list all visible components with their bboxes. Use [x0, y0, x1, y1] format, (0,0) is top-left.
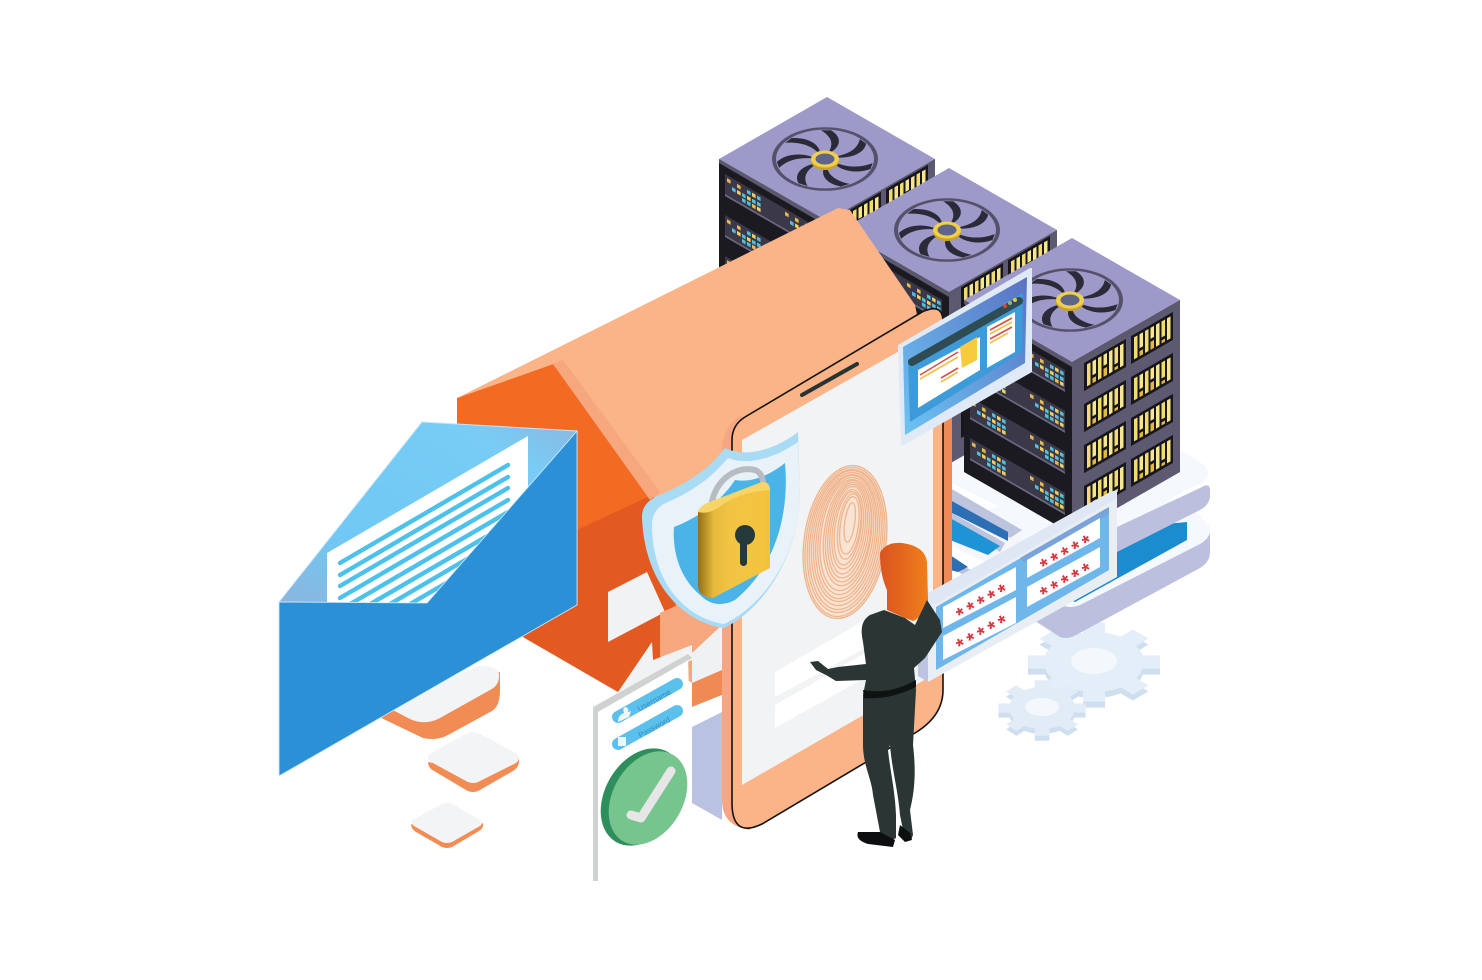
cell: top left: ***** — [953, 578, 1016, 627]
server rack: front — [964, 238, 1180, 534]
window left pane — [918, 337, 980, 408]
icon: small gear — [998, 680, 1086, 741]
padlock — [698, 469, 770, 598]
background box behind phone — [660, 585, 722, 820]
card edge — [593, 654, 692, 881]
body — [810, 600, 942, 845]
tile 2 — [428, 732, 519, 792]
username field: Username — [636, 687, 673, 713]
cell: bottom left: ***** — [953, 609, 1016, 658]
password field — [618, 711, 677, 746]
building wall — [457, 364, 682, 692]
cell: top right: ***** — [1037, 529, 1100, 578]
phone speaker — [802, 364, 857, 395]
belt — [863, 680, 916, 698]
cell: bottom right — [1027, 547, 1100, 607]
hair — [880, 543, 928, 621]
envelope flap — [279, 422, 577, 605]
shoes — [857, 825, 912, 847]
window right pane — [987, 312, 1015, 368]
check badge — [584, 733, 703, 861]
small tile stack — [375, 666, 519, 848]
password panel — [918, 490, 1117, 682]
shield — [642, 432, 800, 628]
shield with padlock — [642, 432, 800, 628]
card body — [593, 655, 692, 882]
woman figure — [810, 543, 942, 847]
phone body — [732, 309, 943, 828]
password field: Password — [637, 715, 672, 740]
building roof — [457, 208, 935, 510]
cell: bottom right: ***** — [1037, 557, 1100, 606]
tile 1 — [375, 666, 500, 739]
card tail — [618, 642, 692, 692]
tile 3 — [411, 802, 483, 848]
envelope front — [279, 431, 577, 776]
cell: bottom left — [943, 597, 1016, 660]
login field 2 — [775, 653, 865, 728]
username field — [618, 684, 677, 722]
phone side edge — [722, 416, 750, 830]
platform under servers — [940, 385, 1210, 638]
letter — [327, 436, 528, 610]
fingerprint — [794, 460, 896, 624]
server rack: back — [719, 97, 935, 393]
browser window panel — [898, 268, 1032, 445]
server rack: middle — [841, 168, 1057, 464]
phone — [722, 309, 952, 830]
window title bar — [912, 298, 1019, 362]
cell: top right — [1027, 518, 1100, 578]
login card — [584, 642, 703, 882]
phone screen — [742, 332, 933, 785]
cell: top left — [943, 567, 1016, 628]
login field 1 — [775, 620, 865, 697]
icon: large gear — [1028, 622, 1160, 708]
envelope — [279, 422, 577, 776]
